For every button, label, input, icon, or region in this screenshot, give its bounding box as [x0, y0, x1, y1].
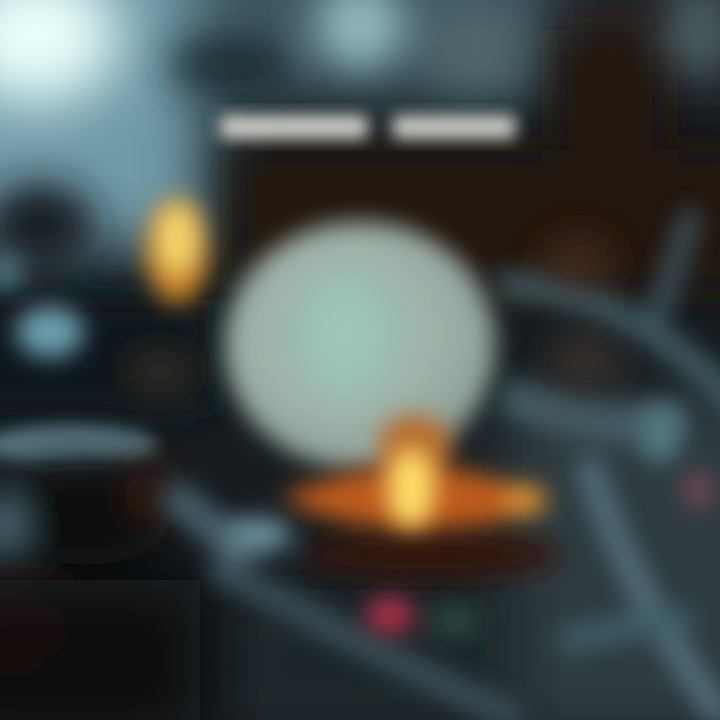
background: lower right machinery haze — [220, 400, 720, 720]
orange fire base — [280, 415, 552, 529]
central flame — [387, 448, 435, 528]
orb inner highlight — [300, 275, 390, 395]
bowl rim — [0, 425, 158, 465]
window glow — [0, 0, 120, 105]
red and green spots — [366, 407, 712, 636]
candle flame left — [145, 196, 209, 304]
crystal orb — [224, 221, 496, 469]
small teal highlight — [0, 254, 84, 358]
dish under flame — [224, 517, 560, 579]
bowl body — [0, 456, 170, 565]
cables right — [180, 220, 720, 716]
top objects — [170, 0, 720, 95]
smudged heading bar — [220, 115, 516, 139]
background: dark brown wall — [235, 30, 720, 290]
bottom left shadow — [0, 580, 200, 720]
brown figure right — [542, 240, 619, 384]
background: upper left haze — [0, 0, 720, 250]
left dark figure — [0, 183, 210, 415]
